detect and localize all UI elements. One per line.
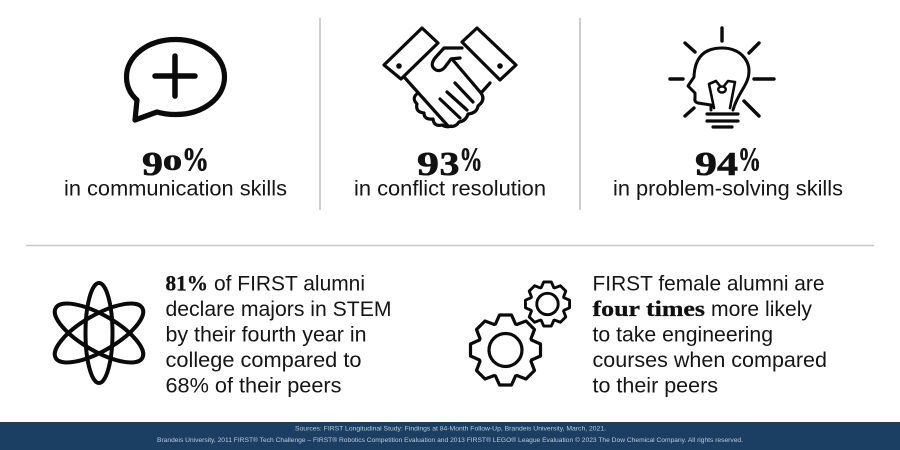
text: female alumni statistic: FIRST female alumni are <box>592 272 824 296</box>
stat: 94%: 9 <box>695 146 717 183</box>
panel: problem-solving skills <box>613 28 843 200</box>
icon: speech bubble with plus <box>126 40 224 120</box>
stat: 90%: 9 <box>142 146 163 183</box>
panel: conflict resolution <box>354 28 546 200</box>
stat: 90% <box>142 142 209 183</box>
stat: 90%: % <box>182 142 209 178</box>
text: female alumni statistic: to take engineering <box>592 324 773 346</box>
icon: atom <box>47 283 151 383</box>
footer: sources: Brandeis University, 2011 FIRST® Tech Challenge – FIRST® Robotics Competition Evaluation and 2013 FIRST® LEGO® League Evaluation © 2023 The Dow Chemical Company. All rights reserved. <box>157 436 743 444</box>
stat: 93%: 9 <box>417 146 439 183</box>
stat: 90%: 0 <box>163 150 182 175</box>
footer: sources: Sources: FIRST Longitudinal Study: Findings at 84-Month Follow-Up, Brandeis University, March, 2021. <box>295 426 606 432</box>
footer: sources <box>0 422 900 450</box>
stat: 93% <box>417 142 482 183</box>
text: female alumni statistic: four times <box>592 296 706 321</box>
stat: 94% <box>695 142 761 183</box>
text: STEM majors statistic <box>166 270 392 398</box>
stat: 94%: % <box>738 142 761 178</box>
stat: 93%: 3 <box>440 146 460 183</box>
text: female alumni statistic: more likely <box>711 298 813 321</box>
text: STEM majors statistic: 68% of their peers <box>166 374 342 398</box>
icon: handshake <box>384 28 516 127</box>
panel: STEM majors <box>47 270 392 398</box>
text: female alumni statistic: courses when compared <box>592 349 827 372</box>
text: STEM majors statistic: by their fourth year in <box>166 324 366 346</box>
stat: 93%: % <box>460 142 482 178</box>
icon: gears <box>470 282 570 385</box>
text: female alumni statistic <box>592 272 827 398</box>
label: in communication skills: in communication skills <box>64 178 287 200</box>
label: in conflict resolution: in conflict resolution <box>354 178 546 200</box>
label: in problem-solving skills: in problem-solving skills <box>613 178 843 200</box>
icon: light bulb head <box>670 28 774 127</box>
text: STEM majors statistic: of FIRST alumni <box>214 272 365 296</box>
stat: 94%: 4 <box>717 146 738 183</box>
text: STEM majors statistic: 81% <box>166 270 208 296</box>
panel: engineering courses <box>470 272 827 398</box>
text: female alumni statistic: to their peers <box>592 374 718 398</box>
text: STEM majors statistic: college compared to <box>166 349 362 372</box>
text: STEM majors statistic: declare majors in STEM <box>166 298 392 321</box>
panel: communication skills <box>64 40 287 200</box>
